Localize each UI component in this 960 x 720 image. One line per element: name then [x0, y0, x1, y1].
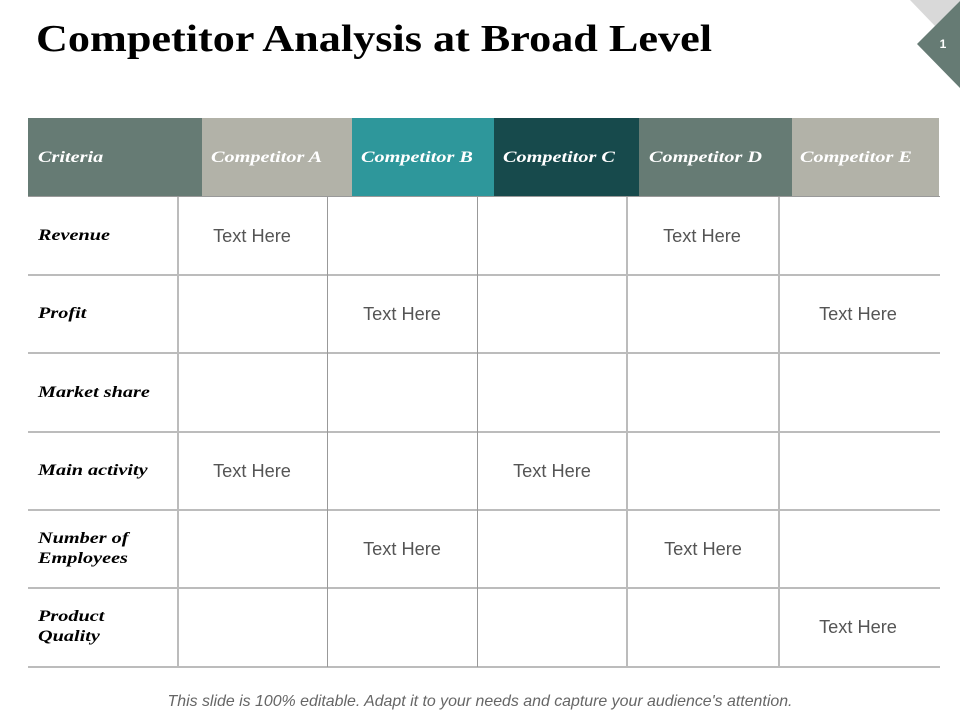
- cell text: Profit, Competitor B: Text Here: [363, 304, 441, 324]
- footer note: This slide is 100% editable. Adapt it to your needs and capture your audience's attention.: [168, 693, 792, 710]
- cell text: Product Quality, Competitor E: Text Here: [819, 617, 897, 637]
- icon: page number corner: [910, 0, 960, 88]
- header cell: Criteria: [28, 118, 202, 196]
- row label: Product Quality: Product: [38, 608, 104, 625]
- row label: Main activity: Main activity: [38, 462, 148, 479]
- row label: Profit: Profit: [38, 305, 86, 322]
- header label: Competitor A: Competitor A: [211, 149, 322, 166]
- row label: Number of Employees: [38, 530, 130, 567]
- row label: Product Quality: Quality: [38, 628, 100, 645]
- cell text: Profit, Competitor E: Text Here: [819, 304, 897, 324]
- row label: Number of Employees: Number of: [38, 530, 129, 547]
- cell text: Employees, Competitor D: Text Here: [664, 539, 742, 559]
- icon: page number corner: 1: [940, 37, 947, 51]
- header label: Competitor C: Competitor C: [503, 149, 615, 166]
- cell text: Revenue, Competitor D: Text Here: [663, 226, 741, 246]
- header cell: Competitor A: [202, 118, 352, 196]
- row label: Revenue: Revenue: [38, 227, 110, 244]
- cell text: Employees, Competitor B: Text Here: [363, 539, 441, 559]
- title: Competitor Analysis at Broad Level: [36, 18, 712, 60]
- header label: Competitor B: Competitor B: [361, 149, 473, 166]
- header label: Competitor D: Competitor D: [649, 149, 762, 166]
- header cell: Competitor E: [792, 118, 939, 196]
- row label: Product Quality: [38, 608, 105, 645]
- header label: Criteria: Criteria: [38, 149, 103, 166]
- row label: Market share: Market share: [38, 384, 150, 401]
- header cell: Competitor D: [639, 118, 792, 196]
- cell text: Main activity, Competitor C: Text Here: [513, 461, 591, 481]
- header label: Competitor E: Competitor E: [800, 149, 912, 166]
- cell text: Main activity, Competitor A: Text Here: [213, 461, 291, 481]
- cell text: Revenue, Competitor A: Text Here: [213, 226, 291, 246]
- header cell: Competitor C: [494, 118, 639, 196]
- row label: Number of Employees: Employees: [38, 550, 128, 567]
- header cell: Competitor B: [352, 118, 494, 196]
